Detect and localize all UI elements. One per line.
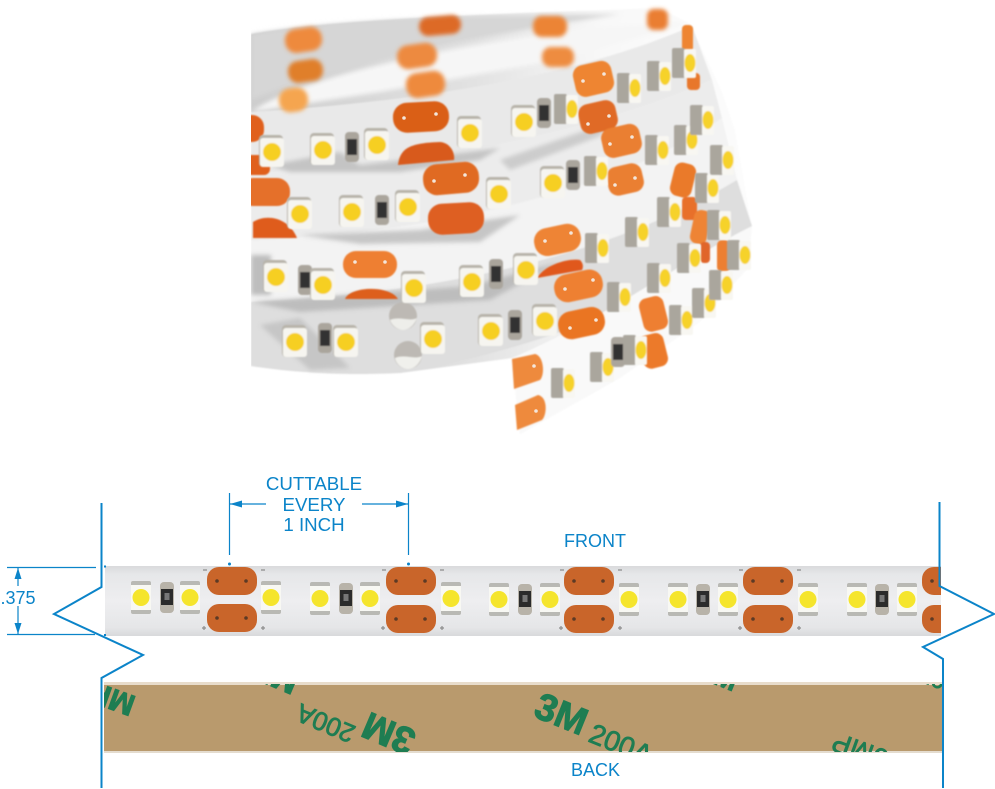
back strip photo: adhesive tape: 3M [695, 654, 742, 697]
copper solder pads [202, 567, 972, 633]
back strip photo: adhesive tape: 3M [357, 703, 422, 762]
height dimension: .375: .375 [0, 588, 36, 608]
front strip photo [105, 566, 972, 636]
strip corner marks [104, 566, 106, 636]
back strip photo: adhesive tape: 3M [529, 685, 593, 744]
label: cuttable every 1 inch: CUTTABLE [266, 473, 362, 494]
back strip photo: adhesive tape: 00MP [828, 726, 907, 780]
label: cuttable every 1 inch: EVERY [282, 494, 346, 515]
right break line [923, 502, 994, 788]
blurred far pads [277, 9, 668, 114]
photo LEDs [259, 48, 751, 398]
coil body [251, 11, 752, 374]
back strip photo: adhesive tape: MP [248, 652, 303, 700]
back strip photo: adhesive tape [104, 682, 942, 753]
back strip photo: adhesive tape: 200A [585, 718, 657, 771]
height dimension: .375 [0, 568, 96, 634]
LEDs and resistors [131, 581, 917, 616]
back strip photo: adhesive tape: 200A [291, 697, 359, 749]
label: back: BACK [571, 760, 620, 780]
back strip photo: adhesive tape: 200 [915, 661, 962, 701]
pad solder dots [353, 72, 637, 413]
product photo: coiled LED strip [240, 8, 752, 434]
back strip photo: adhesive tape: MP [86, 675, 139, 721]
label: cuttable every 1 inch: 1 INCH [283, 514, 345, 535]
left break line [54, 503, 143, 788]
label: front: FRONT [564, 531, 626, 551]
cut spacing dimension [228, 473, 410, 566]
sharp pads [240, 25, 730, 430]
